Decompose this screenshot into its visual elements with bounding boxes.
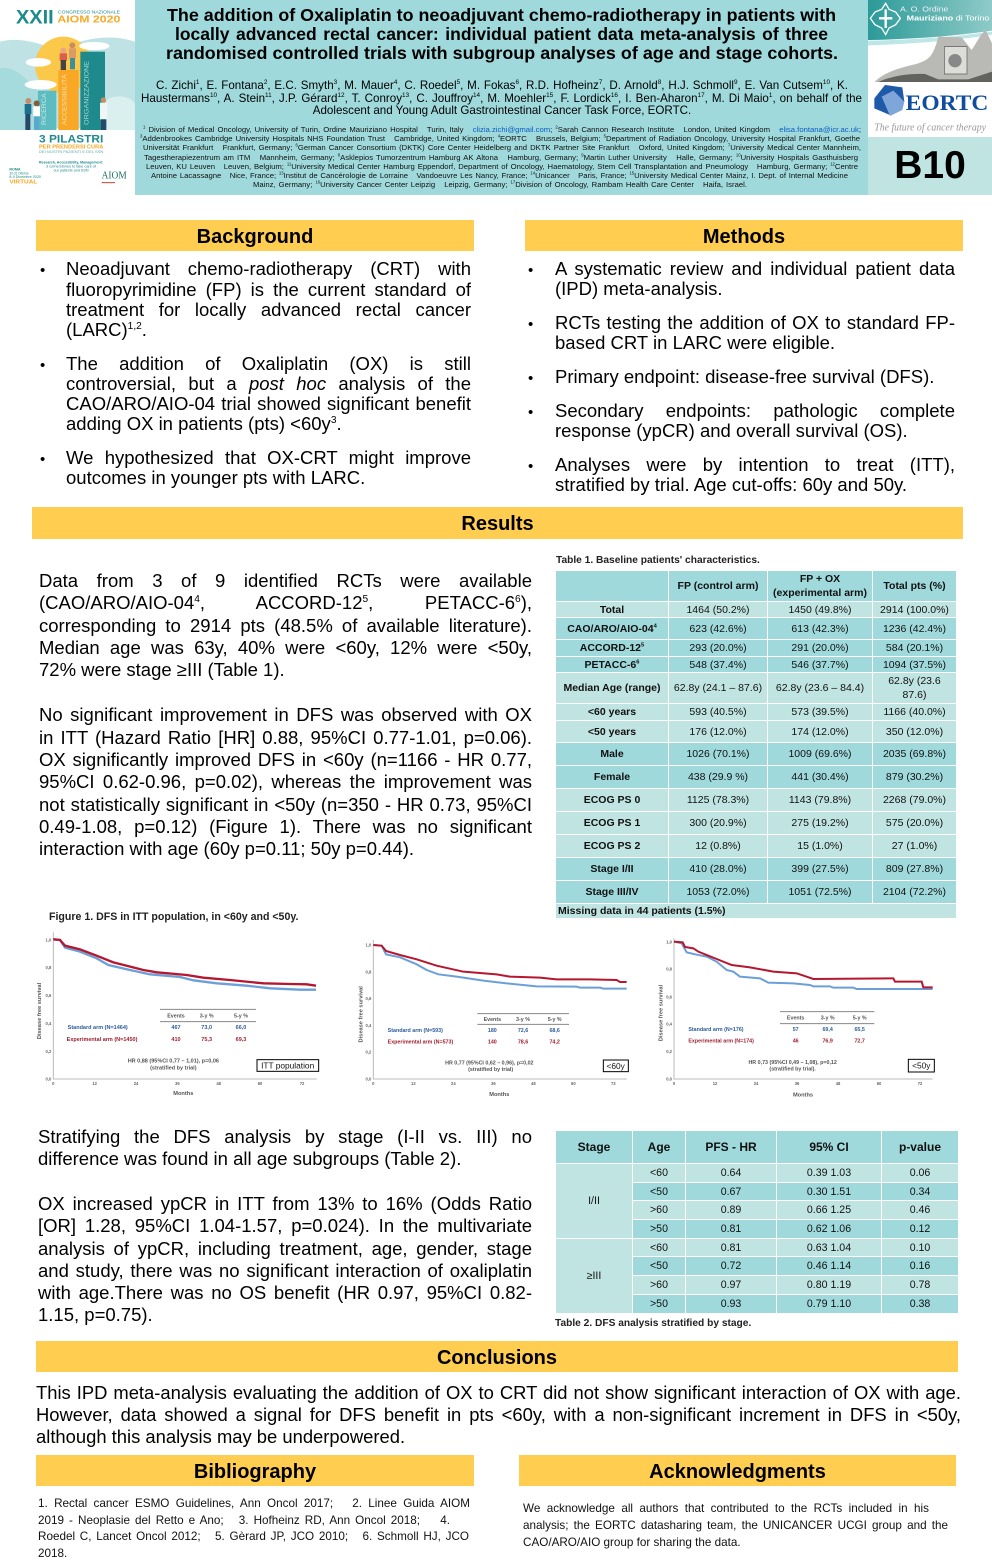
chart: DFS in patients under 60y: 36 [491, 1081, 496, 1086]
table 2: DFS by stage: <50 [650, 1260, 668, 1272]
table 1: baseline characteristics: Median Age (range) [563, 682, 661, 694]
chart: DFS in patients under 50y: 24 [754, 1081, 759, 1086]
congress poster: AIOM 2020: CONGRESSO NAZIONALE [58, 9, 120, 14]
chart: DFS in ITT population: 0,8 [46, 965, 52, 970]
table 2: DFS by stage: >60 [650, 1279, 668, 1291]
chart: DFS in patients under 50y: 12 [713, 1081, 718, 1086]
table 1: baseline characteristics: ECOG PS 1 [584, 817, 640, 829]
table 1: baseline characteristics: <50 years [588, 726, 636, 738]
table 1: baseline characteristics: 1464 (50.2%) [686, 604, 750, 616]
table 2: DFS by stage [556, 1131, 958, 1313]
table 1: baseline characteristics: 809 (27.8%) [886, 863, 943, 875]
chart: DFS in patients under 60y: 0,6 [366, 996, 372, 1001]
chart: DFS in patients under 60y: 12 [411, 1081, 416, 1086]
chart: DFS in ITT population: 5-y % [234, 1013, 248, 1019]
chart: DFS in ITT population: Months [173, 1091, 193, 1097]
chart: DFS in ITT population: 60 [258, 1081, 263, 1086]
table 1: baseline characteristics [556, 571, 956, 918]
congress poster: AIOM 2020: XXII [16, 7, 54, 28]
chart: DFS in ITT population: 36 [175, 1081, 180, 1086]
table 2: DFS by stage: 0.81 [721, 1242, 741, 1254]
chart: DFS in ITT population: (stratified by trial) [150, 1066, 197, 1072]
congress poster: AIOM 2020: DEI NOSTRI PAZIENTI E DEL SSN [39, 149, 103, 154]
text block: bibliography: 2018. [38, 1547, 67, 1560]
table 1: baseline characteristics: Stage III/IV [585, 886, 639, 898]
chart: DFS in patients under 50y: <50y [912, 1061, 931, 1071]
title: locally advanced rectal cancer: individual patient data meta-analysis of three [175, 24, 828, 44]
table 1: baseline characteristics: 1094 (37.5%) [883, 658, 946, 670]
chart: DFS in ITT population: 0 [52, 1081, 55, 1086]
congress poster: AIOM 2020: VIRTUAL [9, 180, 38, 186]
chart: DFS in ITT population [37, 932, 320, 1097]
congress poster: AIOM 2020: Research, Accessibility, Management: [39, 161, 103, 165]
table 2: DFS by stage: 0.30 1.51 [807, 1186, 851, 1198]
table 1: baseline characteristics: Stage I/II [590, 863, 634, 875]
table 1: baseline characteristics: 575 (20.0%) [886, 817, 943, 829]
table 1: baseline characteristics: (experimental arm) [773, 587, 867, 599]
authors [141, 79, 862, 117]
chart: DFS in patients under 60y: 68,6 [549, 1028, 560, 1034]
chart: DFS in patients under 60y: 74,2 [549, 1040, 560, 1046]
text block: methods: • [528, 262, 533, 279]
text block: background [40, 259, 471, 488]
table 2: DFS by stage: p-value [899, 1140, 941, 1154]
congress poster: AIOM 2020: 3 cornerstones to take care of [46, 165, 97, 169]
table 2: DFS by stage: >50 [650, 1298, 668, 1310]
table 1: baseline characteristics: 12 (0.8%) [695, 840, 741, 852]
table 1: baseline characteristics: 584 (20.1%) [886, 642, 943, 654]
chart: DFS in ITT population: 72 [300, 1081, 305, 1086]
table 1: baseline characteristics: 879 (30.2%) [886, 771, 943, 783]
chart: DFS in ITT population: 467 [171, 1025, 181, 1031]
chart: DFS in patients under 50y: 0,0 [666, 1076, 673, 1081]
heading: Bibliography [36, 1455, 474, 1486]
text block: background: • [40, 357, 45, 374]
heading: Conclusions: Conclusions [437, 1347, 557, 1369]
table 2: DFS by stage: <60 [650, 1167, 668, 1179]
table 1: baseline characteristics: Missing data in 44 patients (1.5%) [558, 905, 725, 917]
chart: DFS in patients under 60y: HR 0,77 (95%CI 0,62 – 0,96), p=0,02 [445, 1061, 534, 1067]
table 1: baseline characteristics: Total pts (%) [883, 580, 946, 592]
table 2: DFS by stage: 0.39 1.03 [807, 1167, 851, 1179]
chart: DFS in ITT population: 66,0 [236, 1025, 246, 1031]
table 2: DFS by stage: Age [648, 1140, 670, 1154]
congress poster: AIOM 2020: 8-9 Dicembre 2020 [9, 175, 41, 179]
table 1: baseline characteristics: 546 (37.7%) [791, 658, 849, 670]
chart: DFS in patients under 60y: <60y [607, 1061, 626, 1071]
logos: Mauriziano and EORTC [868, 0, 992, 134]
table 2: DFS by stage: 0.93 [721, 1298, 741, 1310]
congress poster: AIOM 2020: 3 PILASTRI [39, 133, 103, 145]
chart: DFS in patients under 60y: 0,8 [366, 969, 372, 974]
table 1: baseline characteristics: 291 (20.0%) [791, 642, 849, 654]
text block: methods: • [528, 316, 533, 333]
chart: DFS in ITT population: 0,4 [46, 1021, 52, 1026]
text block: bibliography [38, 1497, 470, 1560]
chart: DFS in patients under 50y: 65,5 [854, 1027, 865, 1033]
table 2: DFS by stage: 0.81 [721, 1223, 741, 1235]
chart: DFS in patients under 50y: 72,7 [854, 1039, 865, 1045]
congress poster: AIOM 2020: AIOM 2020 [57, 15, 121, 26]
table 1 caption: Table 1. Baseline patients' characteristics. [556, 555, 760, 566]
table 1: baseline characteristics: 441 (30.4%) [791, 771, 849, 783]
table 1: baseline characteristics: FP (control arm) [678, 580, 758, 592]
poster code: B10: B10 [894, 144, 966, 187]
table 1: baseline characteristics: 1009 (69.6%) [788, 748, 852, 760]
chart: DFS in ITT population: 12 [92, 1081, 98, 1086]
table 1: baseline characteristics: 410 (28.0%) [689, 863, 747, 875]
table 1: baseline characteristics: 548 (37.4%) [689, 658, 747, 670]
chart: DFS in patients under 60y: 48 [531, 1081, 536, 1086]
table 2: DFS by stage: 0.46 1.14 [807, 1260, 851, 1272]
table 2: DFS by stage: 0.16 [910, 1260, 930, 1272]
table 1: baseline characteristics: ECOG PS 0 [584, 794, 640, 806]
table 1: baseline characteristics: Total [600, 604, 624, 616]
chart: DFS in ITT population: Experimental arm (N=1450) [67, 1037, 138, 1043]
chart: DFS in patients under 60y: Events [484, 1017, 501, 1023]
congress poster: AIOM 2020: AIOM [102, 171, 127, 182]
table 2: DFS by stage: I/II [588, 1195, 600, 1207]
table 1: baseline characteristics: 573 (39.5%) [791, 706, 849, 718]
table 1: baseline characteristics: 293 (20.0%) [689, 642, 747, 654]
logos: Mauriziano and EORTC: A. O. Ordine [900, 4, 948, 13]
chart: DFS in patients under 50y: 48 [836, 1081, 841, 1086]
table 1: baseline characteristics: 15 (1.0%) [797, 840, 843, 852]
table 2: DFS by stage: 0.79 1.10 [807, 1298, 851, 1310]
table 1: baseline characteristics: 62.8y (23.6 [888, 675, 941, 687]
chart: DFS in patients under 60y: Experimental arm (N=573) [388, 1040, 453, 1046]
chart: DFS in ITT population: 0,2 [46, 1049, 52, 1054]
table 1: baseline characteristics: 1143 (79.8%) [789, 794, 851, 806]
table 1: baseline characteristics: 62.8y (24.1 – 87.6) [674, 682, 762, 694]
chart: DFS in patients under 60y: 0,0 [366, 1076, 372, 1081]
chart: DFS in ITT population: 3-y % [200, 1013, 214, 1019]
chart: DFS in patients under 50y: 3-y % [821, 1015, 835, 1021]
congress poster: AIOM 2020: 30-31 Ottobre [9, 171, 29, 175]
table 1: baseline characteristics: <60 years [588, 706, 636, 718]
chart: DFS in patients under 50y: 57 [793, 1027, 799, 1033]
table 1: baseline characteristics: 399 (27.5%) [791, 863, 849, 875]
chart: DFS in patients under 50y: 36 [795, 1081, 800, 1086]
chart: DFS in patients under 50y: 72 [918, 1081, 923, 1086]
chart: DFS in patients under 60y: Standard arm (N=593) [388, 1028, 443, 1034]
chart: DFS in patients under 50y: 76,9 [822, 1039, 833, 1045]
chart: DFS in ITT population: 0,0 [46, 1076, 52, 1081]
chart: DFS in ITT population: ITT population [261, 1061, 315, 1071]
chart: DFS in ITT population: 75,3 [201, 1037, 212, 1043]
chart: DFS in ITT population: 69,3 [236, 1037, 246, 1043]
chart: DFS in patients under 50y [658, 938, 935, 1098]
table 1: baseline characteristics: 350 (12.0%) [886, 726, 943, 738]
chart: DFS in ITT population: 73,0 [201, 1025, 212, 1031]
header panel [135, 0, 868, 195]
table 1: baseline characteristics: Female [594, 771, 630, 783]
logos: Mauriziano and EORTC: The future of cancer therapy [874, 123, 987, 134]
chart: DFS in patients under 50y: 60 [877, 1081, 882, 1086]
figure 1 caption: Figure 1. DFS in ITT population, in <60y and <50y. [49, 911, 298, 923]
table 2: DFS by stage: PFS - HR [705, 1140, 757, 1154]
chart: DFS in patients under 50y: Experimental arm (N=174) [688, 1039, 754, 1045]
table 1: baseline characteristics: 275 (19.2%) [791, 817, 849, 829]
heading: Results: Results [461, 513, 534, 535]
table 2: DFS by stage: >60 [650, 1204, 668, 1216]
table 1: baseline characteristics: ACCORD-125 [580, 642, 644, 654]
chart: DFS in patients under 50y: 0,8 [666, 967, 673, 972]
heading: Bibliography: Bibliography [194, 1461, 316, 1483]
heading: Conclusions [36, 1341, 958, 1372]
chart: DFS in patients under 50y: HR 0,73 (95%CI 0,49 – 1,08), p=0,12 [748, 1060, 837, 1066]
table 2: DFS by stage: 0.72 [721, 1260, 741, 1272]
table 1: baseline characteristics: 2268 (79.0%) [883, 794, 946, 806]
text block: stage and ypCR results [38, 1127, 532, 1325]
text block: acknowledgments: analysis; the EORTC datasharing team, the UNICANCER UCGI group and the [523, 1519, 948, 1532]
chart: DFS in patients under 50y: Events [787, 1015, 804, 1021]
table 2: DFS by stage: 0.62 1.06 [807, 1223, 851, 1235]
table 2: DFS by stage: 0.64 [721, 1167, 741, 1179]
text block: conclusions [36, 1383, 961, 1447]
chart: DFS in patients under 60y: Months [489, 1092, 509, 1098]
text block: acknowledgments: We acknowledge all authors that contributed to the RCTs included in his [523, 1502, 929, 1515]
table 1: baseline characteristics: ECOG PS 2 [584, 840, 640, 852]
congress poster: AIOM 2020 [0, 7, 135, 186]
chart: DFS in patients under 50y: Disease free survival [658, 984, 664, 1041]
chart: DFS in patients under 60y: Disease free survival [358, 986, 364, 1042]
chart: DFS in patients under 60y: (stratified by trial) [468, 1067, 513, 1073]
table 1: baseline characteristics: 1450 (49.8%) [788, 604, 852, 616]
text block: methods: • [528, 370, 533, 387]
chart: DFS in ITT population: HR 0,88 (95%CI 0,77 – 1,01), p=0,06 [128, 1058, 219, 1064]
text block: acknowledgments: CAO/ARO/AIO group for sharing the data. [523, 1536, 741, 1549]
chart: DFS in patients under 50y: 0,4 [666, 1022, 673, 1027]
table 2: DFS by stage: 0.06 [910, 1167, 930, 1179]
chart: DFS in patients under 60y: 0,4 [366, 1023, 372, 1028]
table 1: baseline characteristics: 174 (12.0%) [791, 726, 849, 738]
table 1: baseline characteristics: 87.6) [903, 689, 926, 701]
table 2: DFS by stage: 0.34 [910, 1186, 930, 1198]
chart: DFS in ITT population: 48 [216, 1081, 222, 1086]
chart: DFS in patients under 50y: 1,0 [666, 939, 673, 944]
chart: DFS in ITT population: 0,6 [46, 993, 52, 998]
table 1: baseline characteristics: 2914 (100.0%) [880, 604, 949, 616]
chart: DFS in patients under 50y: 0,2 [666, 1049, 673, 1054]
table 1: baseline characteristics: 593 (40.5%) [689, 706, 747, 718]
chart: DFS in patients under 50y: Months [793, 1092, 813, 1098]
text block: results summary [39, 571, 532, 859]
text block: background: • [40, 262, 45, 279]
table 2: DFS by stage: 0.46 [910, 1204, 930, 1216]
chart: DFS in ITT population: Disease free survival [37, 982, 43, 1039]
text block: methods: • [528, 458, 533, 475]
title: randomised controlled trials with subgroup analyses of age and stage cohorts. [166, 43, 838, 63]
chart: DFS in ITT population: 1,0 [46, 937, 52, 942]
table 2 caption: Table 2. DFS analysis stratified by stage. [555, 1318, 751, 1329]
table 2: DFS by stage: 0.80 1.19 [807, 1279, 851, 1291]
table 2: DFS by stage: 0.78 [910, 1279, 930, 1291]
chart: DFS in ITT population: Standard arm (N=1464) [68, 1025, 128, 1031]
table 1: baseline characteristics: Male [600, 748, 624, 760]
heading: Background: Background [197, 226, 313, 248]
chart: DFS in patients under 60y: 0,2 [366, 1050, 372, 1055]
chart: DFS in patients under 60y: 5-y % [548, 1017, 562, 1023]
table 2: DFS by stage: 0.66 1.25 [807, 1204, 851, 1216]
text block: bibliography: Roedel C, Lancet Oncol 2012; 5. Gèrard JP, JCO 2010; 6. Schmoll HJ, JCO [38, 1530, 469, 1543]
congress poster: AIOM 2020: ACCESSIBILITÀ [61, 74, 68, 125]
table 2: DFS by stage: 0.89 [721, 1204, 741, 1216]
heading: Methods [525, 220, 963, 251]
chart: DFS in patients under 50y: 5-y % [853, 1015, 867, 1021]
chart: DFS in patients under 60y: 3-y % [516, 1017, 530, 1023]
table 1: baseline characteristics: 1236 (42.4%) [883, 622, 946, 634]
chart: DFS in patients under 50y: 0 [673, 1081, 676, 1086]
congress poster: AIOM 2020: our patients and SSN [54, 169, 89, 173]
table 1: baseline characteristics: PETACC-66 [585, 658, 639, 670]
heading: Background [36, 220, 474, 251]
chart: DFS in patients under 60y: 72,6 [518, 1028, 528, 1034]
table 1: baseline characteristics: 623 (42.6%) [689, 622, 747, 634]
table 1: baseline characteristics: CAO/ARO/AIO-044 [567, 622, 657, 634]
chart: DFS in patients under 60y: 72 [611, 1081, 616, 1086]
chart: DFS in ITT population: 410 [171, 1037, 181, 1043]
table 1: baseline characteristics: FP + OX [800, 573, 840, 585]
congress poster: AIOM 2020: ROMA [9, 167, 21, 171]
text block: methods [528, 259, 955, 495]
text block: background: • [40, 451, 45, 468]
table 2: DFS by stage: ≥III [587, 1270, 601, 1282]
congress poster: AIOM 2020: ORGANIZZAZIONE [84, 61, 90, 125]
table 2: DFS by stage: 0.97 [721, 1279, 741, 1291]
table 1: baseline characteristics: 1026 (70.1%) [686, 748, 750, 760]
table 1: baseline characteristics: 438 (29.9 %) [688, 771, 748, 783]
chart: DFS in patients under 60y [358, 940, 629, 1098]
text block: methods: • [528, 404, 533, 421]
table 2: DFS by stage: <50 [650, 1186, 668, 1198]
table 2: DFS by stage: 0.38 [910, 1298, 930, 1310]
chart: DFS in patients under 50y: (stratified by trial). [769, 1067, 816, 1073]
heading: Methods: Methods [703, 226, 785, 248]
table 1: baseline characteristics: 1053 (72.0%) [686, 886, 750, 898]
table 1: baseline characteristics: 2104 (72.2%) [883, 886, 946, 898]
congress poster: AIOM 2020: PER PRENDERSI CURA [39, 145, 103, 151]
heading: Acknowledgments: Acknowledgments [649, 1461, 826, 1483]
table 1: baseline characteristics: 1125 (78.3%) [687, 794, 749, 806]
heading: Acknowledgments [519, 1455, 956, 1486]
chart: DFS in ITT population: 24 [134, 1081, 139, 1086]
table 1: baseline characteristics: 27 (1.0%) [892, 840, 937, 852]
table 1: baseline characteristics: 176 (12.0%) [689, 726, 747, 738]
affiliations [140, 125, 861, 189]
table 1: baseline characteristics: 613 (42.3%) [791, 622, 849, 634]
authors: C. Zichi1, E. Fontana2, E.C. Smyth3, M. Mauer4, C. Roedel5, M. Fokas6, R.D. Hofheinz7, D. Arnold8, H.J. Schmoll9, E. Van Cutsem10, K. [156, 79, 848, 92]
chart: DFS in patients under 60y: 180 [488, 1028, 497, 1034]
authors: Adolescent and Young Adult Gastrointestinal Cancer Task Force, EORTC. [313, 104, 691, 117]
chart: DFS in patients under 60y: 78,6 [518, 1040, 528, 1046]
text block: bibliography: 1. Rectal cancer ESMO Guidelines, Ann Oncol 2017; 2. Linee Guida AIOM [38, 1497, 470, 1510]
table 1: baseline characteristics: 300 (20.9%) [689, 817, 747, 829]
table 2: DFS by stage: Stage [578, 1140, 610, 1154]
table 2: DFS by stage: 0.63 1.04 [807, 1242, 851, 1254]
text block: acknowledgments [523, 1502, 948, 1549]
chart: DFS in patients under 60y: 1,0 [366, 942, 372, 947]
chart: DFS in patients under 60y: 0 [372, 1081, 375, 1086]
chart: DFS in patients under 60y: 140 [488, 1040, 497, 1046]
congress poster: AIOM 2020: RICERCA [42, 93, 48, 125]
chart: DFS in patients under 50y: 46 [793, 1039, 799, 1045]
chart: DFS in ITT population: Events [167, 1013, 185, 1019]
logos: Mauriziano and EORTC: Mauriziano di Torino [907, 16, 989, 23]
table 2: DFS by stage: 0.12 [910, 1223, 930, 1235]
table 1: baseline characteristics: 1051 (72.5%) [788, 886, 852, 898]
chart: DFS in patients under 60y: 24 [451, 1081, 456, 1086]
table 1: baseline characteristics: 2035 (69.8%) [883, 748, 946, 760]
chart: DFS in patients under 50y: Standard arm (N=176) [688, 1027, 744, 1033]
table 2: DFS by stage: 95% CI [809, 1140, 849, 1154]
chart: DFS in patients under 50y: 69,4 [822, 1027, 833, 1033]
table 2: DFS by stage: 0.10 [910, 1242, 930, 1254]
poster code: B10 [868, 137, 992, 195]
heading: Results [32, 507, 963, 539]
logos: Mauriziano and EORTC: EORTC [906, 90, 988, 115]
table 1: baseline characteristics: 62.8y (23.6 – 84.4) [776, 682, 864, 694]
table 2: DFS by stage: <60 [650, 1242, 668, 1254]
table 2: DFS by stage: 0.67 [721, 1186, 741, 1198]
title: The addition of Oxaliplatin to neoadjuvant chemo-radiotherapy in patients with [167, 5, 836, 25]
title [166, 5, 838, 63]
chart: DFS in patients under 60y: 60 [571, 1081, 576, 1086]
table 2: DFS by stage: >50 [650, 1223, 668, 1235]
authors: Haustermans10, A. Stein11, J.P. Gérard12, T. Conroy13, C. Jouffroy14, M. Moehler15, F. Lordick16, I. Ben-Aharon17, M. Di Maio1, on behalf of the [141, 92, 862, 105]
table 1: baseline characteristics: 1166 (40.0%) [883, 706, 946, 718]
text block: bibliography: 2019 - Neoplasie del Retto e Ano; 3. Hofheinz RD, Ann Oncol 2018; 4. [38, 1514, 450, 1527]
chart: DFS in patients under 50y: 0,6 [666, 994, 673, 999]
